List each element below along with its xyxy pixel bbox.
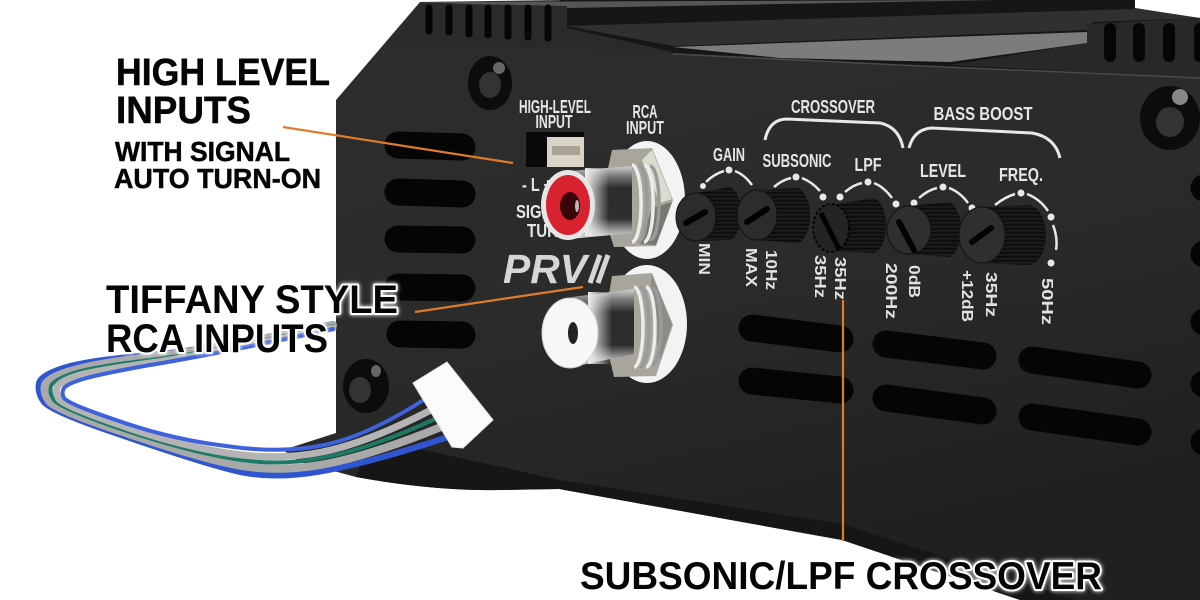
heading: high level inputs: HIGH LEVEL	[116, 52, 330, 94]
panel printing: labels: INPUT	[536, 112, 573, 132]
screw: bottom left	[343, 359, 389, 413]
panel printing: labels	[503, 97, 1043, 292]
left fin block	[393, 3, 673, 52]
right fin block	[950, 18, 1200, 78]
callout line: subsonic lpf crossover	[842, 300, 844, 541]
red tip	[541, 170, 595, 240]
dial range labels: 35Hz	[982, 272, 999, 317]
label: signal turn-on: SIGNAL	[516, 202, 572, 222]
barrel	[570, 166, 632, 239]
threads	[632, 165, 659, 242]
logo slash marks	[590, 255, 608, 283]
dial range labels: 50Hz	[1038, 278, 1055, 325]
top shelf dark recess	[560, 0, 1200, 78]
dial range labels: 10Hz	[762, 250, 779, 290]
label: high-level input: HIGH-LEVEL	[519, 97, 591, 117]
threads	[634, 287, 661, 367]
heading: high level inputs: INPUTS	[116, 90, 251, 132]
label: crossover: CROSSOVER	[791, 97, 875, 117]
subheading: with signal auto turn-on	[114, 136, 321, 194]
label: gain: GAIN	[713, 145, 745, 165]
label: bass boost: BASS BOOST	[934, 104, 1033, 124]
dial range labels: MIN	[695, 243, 712, 275]
subheading: with signal auto turn-on: AUTO TURN-ON	[114, 163, 321, 194]
left heat-sink fins	[429, 8, 548, 38]
heading: high level inputs	[116, 52, 330, 132]
high-level input socket	[526, 132, 584, 167]
dial range labels: 200Hz	[882, 263, 899, 319]
heading: subsonic lpf crossover: SUBSONIC/LPF CROSSOVER	[580, 555, 1102, 598]
dial range labels: +12dB	[958, 270, 975, 322]
vent slots	[398, 145, 1200, 442]
white flange washer	[607, 265, 687, 383]
face top edge highlight	[673, 54, 1200, 78]
white tip	[542, 298, 598, 368]
label: level: LEVEL	[920, 161, 966, 181]
label: left right polarity: - L +	[522, 175, 552, 195]
dial range labels	[695, 243, 1055, 325]
lpf knob	[813, 198, 886, 253]
callout line: high level inputs	[283, 127, 513, 163]
gain knob	[676, 187, 741, 241]
grey top plate	[673, 32, 1087, 62]
wiring harness	[39, 324, 448, 476]
screw: top left	[468, 56, 512, 110]
callout line: tiffany rca inputs	[415, 287, 583, 312]
label: lpf: LPF	[854, 155, 882, 175]
white rca jack	[542, 265, 687, 383]
dial range labels: 35Hz	[831, 257, 848, 300]
heading: tiffany style rca inputs: TIFFANY STYLE	[106, 278, 398, 322]
hex nut	[603, 273, 673, 377]
wire connector plug	[413, 362, 493, 448]
freq knob	[959, 205, 1046, 265]
heading: tiffany style rca inputs	[106, 278, 398, 361]
top grey edge	[420, 0, 1000, 8]
label: rca input: RCA	[632, 102, 658, 122]
dial range labels: 35Hz	[811, 255, 828, 298]
logo text: PRV	[503, 246, 591, 292]
label: subsonic: SUBSONIC	[762, 151, 832, 171]
screw: top right	[1140, 86, 1200, 150]
red rca jack	[541, 141, 685, 259]
subsonic knob	[737, 188, 810, 243]
dial scale marks	[700, 166, 1057, 266]
subheading: with signal auto turn-on: WITH SIGNAL	[115, 136, 290, 167]
heading: tiffany style rca inputs: RCA INPUTS	[106, 317, 328, 361]
amplifier body	[283, 0, 1200, 600]
bottom lip	[356, 447, 1075, 600]
panel printing: labels: INPUT	[626, 118, 664, 138]
white flange washer	[609, 141, 685, 259]
panel printing: labels: TURN	[527, 221, 569, 241]
label: freq: FREQ.	[999, 165, 1043, 185]
right heat-sink fins	[1110, 29, 1200, 56]
dial range labels: 0dB	[905, 265, 922, 298]
level knob	[887, 202, 961, 257]
dial range labels: MAX	[742, 248, 759, 287]
barrel	[572, 289, 634, 367]
crossover and bass boost brackets	[765, 119, 1060, 158]
top shelf surface	[567, 9, 1200, 46]
hex nut	[600, 148, 673, 247]
